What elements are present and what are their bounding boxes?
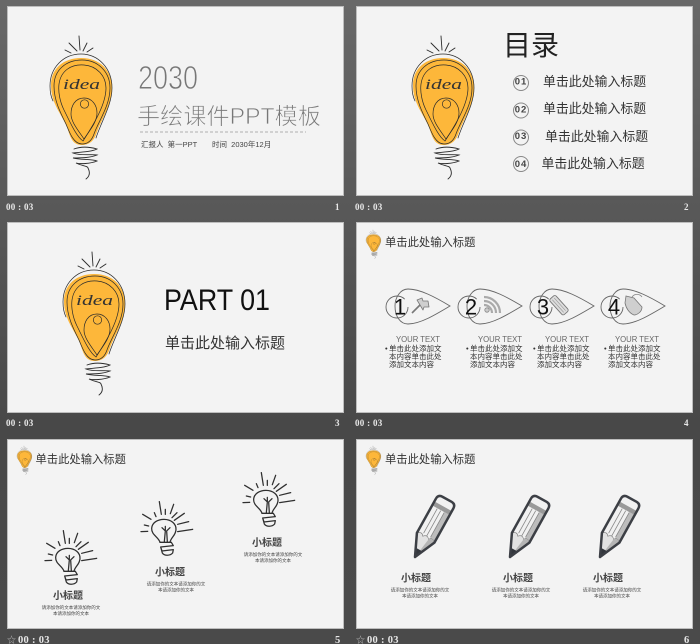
slide title: 单击此处输入标题 [385,235,475,249]
icon: idea light bulb: idea [76,293,113,309]
panel: slide 6 pencils [356,440,692,628]
step 3 text: 本内容单击此处 [537,351,590,361]
step 3 text: 单击此处添加文 [537,343,590,353]
step 4 text: 添加文本内容 [608,359,653,369]
step 4 text: 本内容单击此处 [608,351,661,361]
icon: small bulb [366,230,381,259]
item 3: 本请添加你的文本 [255,557,291,564]
step 1 text [385,334,442,369]
step 4 text: • [604,344,607,353]
footer: slide 4 [355,418,689,428]
footer: slide 2: 2 [684,202,689,212]
step 1 text: 添加文本内容 [389,359,434,369]
panel: slide 3 section [8,222,344,412]
step 4 text: YOUR TEXT [615,334,659,344]
step 2: 2 [465,294,477,320]
step 2 text: 单击此处添加文 [470,343,523,353]
slide title: 单击此处输入标题 [36,452,126,466]
item 3 [583,494,642,600]
presenter and date: 汇报人 第一PPT [141,139,198,149]
panel: slide 4 steps [356,222,692,412]
footer: slide 1 [6,202,340,212]
step 3 text [533,334,590,369]
footer: slide 2: 00 : 03 [355,202,383,212]
item 3: 小标题 [593,572,623,584]
step 1 text: • [385,344,388,353]
item 3: 小标题 [252,536,282,549]
footer: slide 5 [7,635,341,644]
icon: rss [484,297,500,313]
item 01: 01 [515,76,527,88]
item 3 [243,473,303,564]
icon: idea light bulb: idea [425,77,462,93]
item 2: 本请添加你的文本 [158,586,194,594]
item 1: 小标题 [401,572,431,584]
step 1 [385,289,450,369]
step 2 text: 本内容单击此处 [470,351,523,361]
section heading: PART 01 [164,284,270,317]
item 02: 02 [515,104,527,116]
icon: pencil [549,295,569,316]
year heading: 2030 [138,59,198,96]
item 1: 请添加你的文本请添加你的文 [42,604,101,611]
step 2 text [466,334,523,369]
item 04: 单击此处输入标题 [542,156,645,171]
icon: idea light bulb [412,36,474,179]
step 3 text: YOUR TEXT [545,334,589,344]
footer: slide 3 [6,418,340,428]
step 1: 1 [394,294,406,320]
step 3 text: 添加文本内容 [537,359,582,369]
item 1: 请添加你的文本请添加你的文 [391,586,450,594]
item 3: 请添加你的文本请添加你的文 [244,551,303,558]
footer: slide 3: 3 [335,418,340,428]
step 4 text [604,334,661,369]
step 3: 3 [537,294,549,320]
icon: small bulb [366,446,381,475]
footer: slide 3: 00 : 03 [6,418,34,428]
footer: slide 4: 4 [684,418,689,428]
section subtitle: 单击此处输入标题 [165,335,285,352]
step 3 text: • [533,344,536,353]
step 2 [458,289,523,369]
footer: slide 1: 00 : 03 [6,202,34,212]
item 3: 请添加你的文本请添加你的文 [583,586,642,594]
item 2: 请添加你的文本请添加你的文 [147,580,206,588]
item 04: 04 [515,159,527,170]
item 2: 小标题 [503,572,533,584]
item 03: 单击此处输入标题 [545,129,648,144]
item 2: 小标题 [155,566,185,578]
panel: slide 1 cover [8,6,344,196]
item 01: 单击此处输入标题 [543,74,646,89]
step 3 [530,289,594,369]
step 2 text: • [466,344,469,353]
contents heading: 目录 [503,30,559,61]
footer: slide 6 [356,635,690,644]
icon: idea light bulb [63,252,125,395]
item 2 [141,502,206,594]
footer: slide 4: 00 : 03 [355,418,383,428]
main title: 手绘课件PPT模板 [137,103,321,129]
step 1 text: YOUR TEXT [396,334,440,344]
step 2 text: 添加文本内容 [470,359,515,369]
item 1 [42,531,101,617]
icon: tag [625,294,642,315]
panel: slide 2 contents [356,6,692,196]
step 4: 4 [608,294,620,320]
date: 时间 2030年12月 [212,139,271,149]
item 02: 单击此处输入标题 [543,101,646,116]
item 1: 小标题 [53,589,83,602]
step 1 text: 单击此处添加文 [389,343,442,353]
item 1 [391,494,456,600]
icon: small bulb [17,446,32,475]
slide title: 单击此处输入标题 [385,452,475,466]
item 3: 本请添加你的文本 [594,592,630,600]
item 2: 请添加你的文本请添加你的文 [492,586,551,594]
item 02 [514,101,646,118]
panel: slide 5 bulbs [8,440,344,628]
icon: pin [412,298,429,313]
footer: slide 1: 1 [335,202,340,212]
icon: idea light bulb: idea [63,77,100,93]
item 1: 本请添加你的文本 [53,610,89,617]
step 1 text: 本内容单击此处 [389,351,442,361]
item 1: 本请添加你的文本 [402,592,438,600]
icon: idea light bulb [50,36,112,179]
item 03: 03 [515,131,527,142]
footer: slide 2 [355,202,689,212]
item 2 [492,494,551,600]
step 2 text: YOUR TEXT [478,334,522,344]
step 4 [601,289,665,369]
step 4 text: 单击此处添加文 [608,343,661,353]
item 2: 本请添加你的文本 [503,592,539,600]
